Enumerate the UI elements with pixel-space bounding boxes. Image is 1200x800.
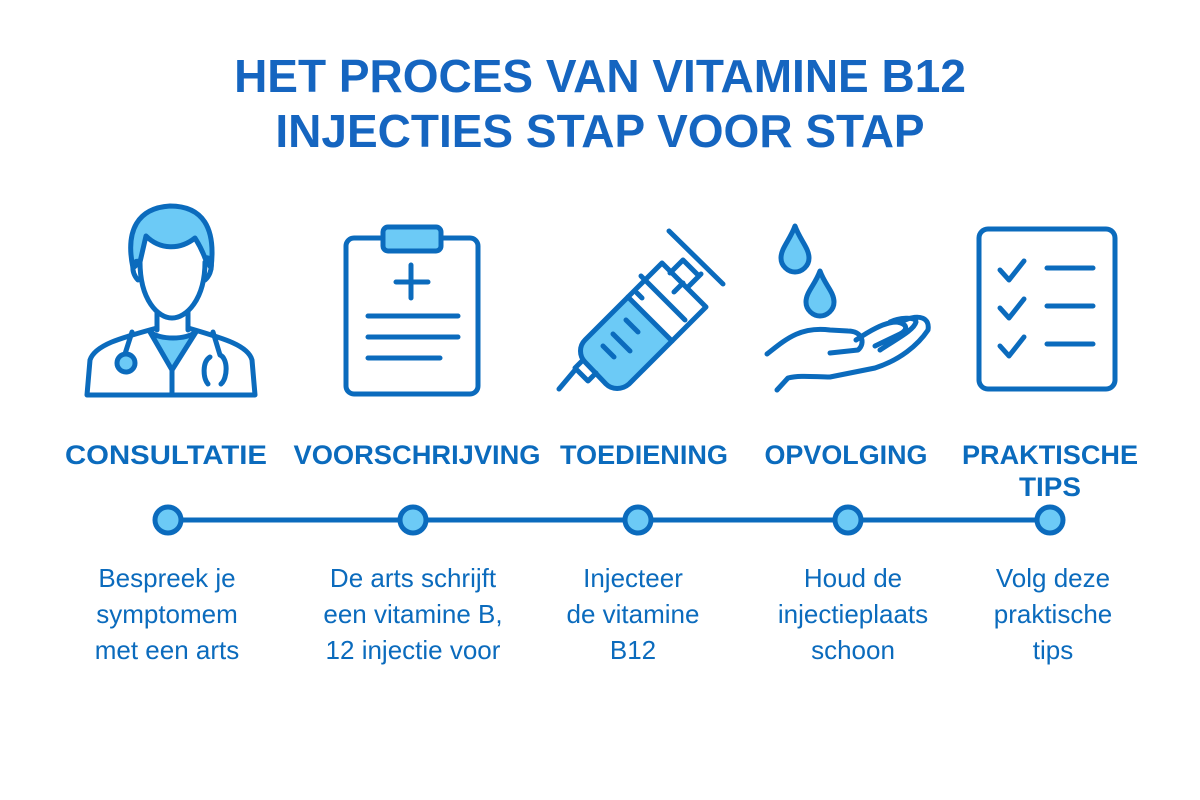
step descriptions: met een arts bbox=[95, 635, 239, 665]
step descriptions: Bespreek je bbox=[98, 563, 236, 593]
title bbox=[234, 50, 966, 157]
step descriptions: Volg deze bbox=[996, 563, 1110, 593]
step descriptions: Houd de bbox=[804, 563, 902, 593]
step labels bbox=[65, 440, 1138, 502]
step descriptions: symptomem bbox=[96, 599, 238, 629]
step descriptions: injectieplaats bbox=[778, 599, 928, 629]
step descriptions: 12 injectie voor bbox=[326, 635, 501, 665]
step descriptions: de vitamine bbox=[567, 599, 699, 629]
step descriptions: een vitamine B, bbox=[323, 599, 503, 629]
icon: syringe bbox=[559, 231, 723, 389]
step labels: TOEDIENING bbox=[560, 440, 728, 470]
step descriptions: B12 bbox=[610, 635, 656, 665]
title: INJECTIES STAP VOOR STAP bbox=[275, 105, 925, 157]
step descriptions: tips bbox=[1033, 635, 1073, 665]
step descriptions: De arts schrijft bbox=[330, 563, 497, 593]
step descriptions: Injecteer bbox=[583, 563, 683, 593]
icon: checklist bbox=[979, 229, 1115, 389]
step descriptions: schoon bbox=[811, 635, 895, 665]
step labels: CONSULTATIE bbox=[65, 440, 267, 470]
step labels: VOORSCHRIJVING bbox=[294, 440, 540, 470]
icon: clipboard bbox=[346, 227, 478, 394]
title: HET PROCES VAN VITAMINE B12 bbox=[234, 50, 966, 102]
step labels: TIPS bbox=[1019, 472, 1081, 502]
timeline bbox=[155, 507, 1063, 533]
step labels: PRAKTISCHE bbox=[962, 440, 1138, 470]
step labels: OPVOLGING bbox=[764, 440, 928, 470]
icon: doctor bbox=[87, 206, 255, 395]
icon: hand with drops bbox=[767, 226, 928, 390]
step descriptions: praktische bbox=[994, 599, 1112, 629]
step descriptions bbox=[95, 563, 1112, 665]
